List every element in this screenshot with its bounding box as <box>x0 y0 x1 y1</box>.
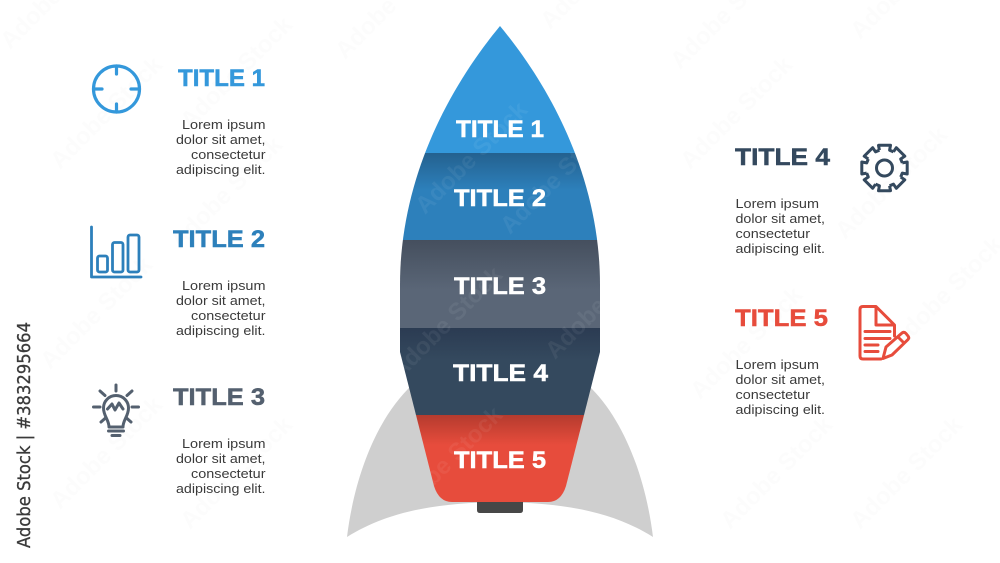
panel: title 1 <box>94 65 266 177</box>
rocket nozzle <box>477 500 523 513</box>
text block: title 1: Lorem ipsum <box>182 117 266 132</box>
text block: title 4: Lorem ipsum <box>736 196 819 211</box>
panel: title 5 <box>735 305 909 417</box>
text block: title 1: adipiscing elit. <box>176 162 266 177</box>
text block: title 5: dolor sit amet, <box>736 372 825 387</box>
icon: crosshair target <box>94 66 140 112</box>
text block: title 3: consectetur <box>191 466 266 481</box>
text block: title 4 <box>736 196 825 256</box>
heading: title 3: TITLE 3 <box>173 384 265 411</box>
text block: title 2: Lorem ipsum <box>182 278 266 293</box>
rocket illustration <box>347 20 663 537</box>
heading: title 1: TITLE 1 <box>178 65 265 92</box>
text block: title 1 <box>176 117 266 177</box>
rocket body segments: Adobe Stock <box>385 401 508 524</box>
rocket fins <box>347 385 653 537</box>
heading: title 2: TITLE 2 <box>173 226 265 253</box>
rocket segment labels: TITLE 2 <box>454 185 546 212</box>
icon: document with pencil <box>860 306 909 359</box>
text block: title 5: Lorem ipsum <box>736 357 819 372</box>
rocket segment labels: TITLE 5 <box>454 447 546 474</box>
text block: title 4: dolor sit amet, <box>736 211 825 226</box>
rocket segment labels: TITLE 1 <box>456 116 544 143</box>
panel: title 4 <box>735 144 907 256</box>
text block: title 2 <box>176 278 266 338</box>
text block: title 3: Lorem ipsum <box>182 436 266 451</box>
text block: title 5: adipiscing elit. <box>736 402 825 417</box>
icon: gear <box>862 145 907 191</box>
rocket body segments: Adobe Stock <box>385 261 508 384</box>
text block: title 4: adipiscing elit. <box>736 241 825 256</box>
icon: light bulb <box>94 385 138 436</box>
rocket body segments: Adobe Stock <box>495 116 618 239</box>
text block: title 5: consectetur <box>736 387 811 402</box>
rocket body segments: Adobe Stock <box>410 96 533 219</box>
panel: title 2 <box>92 226 266 338</box>
text block: title 2: consectetur <box>191 308 266 323</box>
heading: title 4: TITLE 4 <box>735 144 831 171</box>
panel: title 3 <box>94 384 266 496</box>
rocket segment labels: TITLE 3 <box>454 273 546 300</box>
text block: title 4: consectetur <box>736 226 811 241</box>
text block: title 2: dolor sit amet, <box>176 293 266 308</box>
text block: title 3: adipiscing elit. <box>176 481 266 496</box>
text block: title 3 <box>176 436 266 496</box>
text block: title 3: dolor sit amet, <box>176 451 266 466</box>
text block: title 2: adipiscing elit. <box>176 323 266 338</box>
heading: title 5: TITLE 5 <box>735 305 828 332</box>
rocket body segments: Adobe Stock <box>540 241 663 364</box>
text block: title 5 <box>736 357 825 417</box>
text block: title 1: consectetur <box>191 147 266 162</box>
rocket segment labels: TITLE 4 <box>453 360 549 387</box>
rocket body segments <box>400 26 600 502</box>
icon: bar chart <box>92 227 141 277</box>
text block: title 1: dolor sit amet, <box>176 132 266 147</box>
rocket segment labels <box>453 116 549 474</box>
stock image credit: Adobe Stock | #383295664 <box>14 322 35 548</box>
